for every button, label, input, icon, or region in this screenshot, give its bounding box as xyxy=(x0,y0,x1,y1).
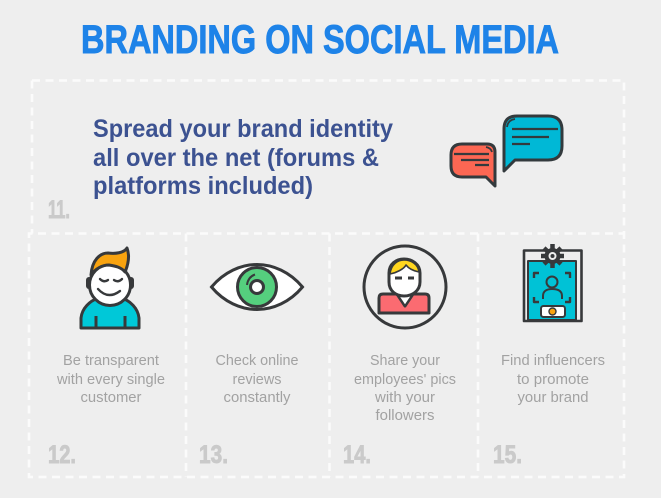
number 15: 15. xyxy=(493,441,522,469)
text: share your: employees' pics xyxy=(354,372,456,388)
text: share your: with your xyxy=(374,390,435,406)
heading: spread your brand identity xyxy=(93,115,393,200)
panel: 14 employees xyxy=(343,246,456,469)
number 14: 14. xyxy=(343,441,371,469)
text: check online: reviews xyxy=(232,372,282,388)
text: find influencers xyxy=(501,353,605,406)
text: find influencers: your brand xyxy=(518,390,588,406)
panel: 11 brand identity xyxy=(48,115,562,224)
text: share your: followers xyxy=(376,408,434,424)
text: check online xyxy=(216,353,298,406)
icon: eye xyxy=(212,264,302,310)
text: be transparent xyxy=(56,353,165,406)
heading: spread your brand identity: platforms included) xyxy=(93,172,313,200)
panel: 12 customer xyxy=(48,248,165,469)
text: be transparent: with every single xyxy=(56,372,165,388)
number 12: 12. xyxy=(48,441,76,469)
icon: speech bubbles xyxy=(451,116,562,186)
number 11: 11. xyxy=(48,196,70,224)
panel: 15 influencers xyxy=(493,244,605,469)
heading: spread your brand identity: Spread your brand identity xyxy=(93,115,393,143)
number 13: 13. xyxy=(199,441,228,469)
text: check online: Check online xyxy=(216,353,298,369)
icon: employee portrait xyxy=(364,246,446,328)
panel: 13 reviews xyxy=(199,264,302,469)
title: BRANDING ON SOCIAL MEDIA xyxy=(81,18,559,62)
text: share your: Share your xyxy=(370,353,440,369)
text: be transparent: Be transparent xyxy=(63,353,159,369)
text: find influencers: to promote xyxy=(517,372,589,388)
text: check online: constantly xyxy=(224,390,291,406)
icon: influencer id frame xyxy=(524,244,582,321)
text: be transparent: customer xyxy=(80,390,142,406)
text: share your xyxy=(354,353,456,424)
icon: smiling man xyxy=(81,248,139,328)
text: find influencers: Find influencers xyxy=(501,353,605,369)
heading: spread your brand identity: all over the net (forums & xyxy=(93,144,379,172)
